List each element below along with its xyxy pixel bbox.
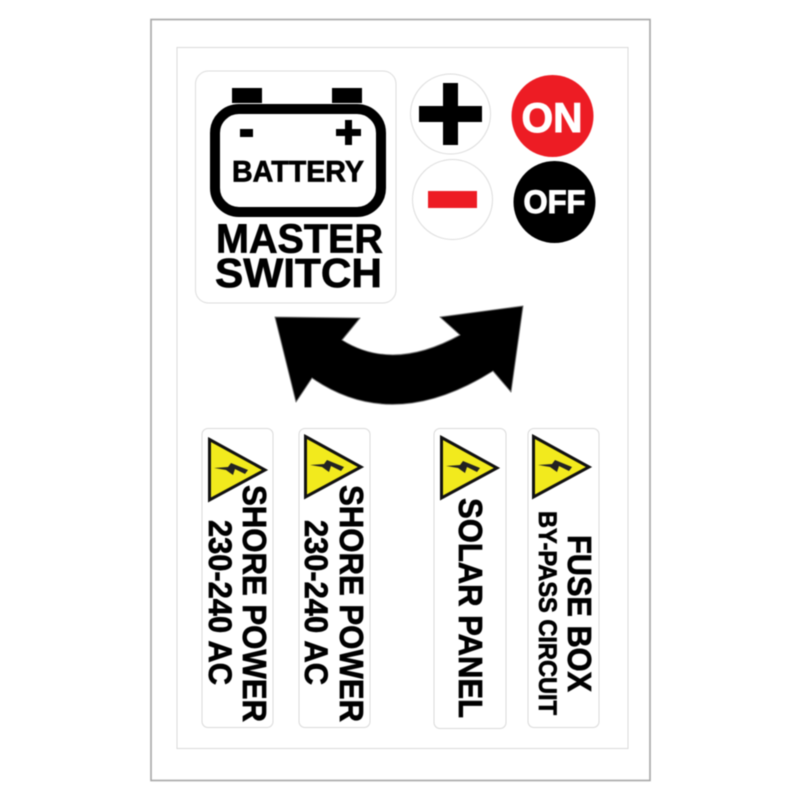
heading: switch: SWITCH bbox=[215, 250, 382, 296]
icon: warning triangle bbox=[534, 436, 589, 497]
label text: voltage: 230-240 AC bbox=[298, 520, 334, 685]
panel: fuse box label bbox=[528, 428, 599, 728]
panel: shore power label 2 bbox=[298, 428, 370, 728]
label text: shore power: SHORE POWER bbox=[236, 485, 273, 722]
outer sheet border bbox=[151, 20, 650, 780]
label text: voltage: 230-240 AC bbox=[202, 520, 238, 685]
icon: warning triangle bbox=[210, 440, 265, 500]
heading: master: MASTER bbox=[216, 216, 383, 262]
icon: on button bbox=[512, 75, 594, 157]
label text: by-pass circuit: BY-PASS CIRCUIT bbox=[533, 511, 561, 715]
icon: warning triangle bbox=[442, 438, 497, 498]
icon: on button: ON bbox=[522, 94, 582, 141]
panel: master switch bbox=[196, 71, 396, 303]
icon: plus button bbox=[410, 74, 490, 154]
inner sheet border bbox=[177, 48, 628, 748]
panel: solar panel label bbox=[434, 428, 506, 728]
battery label: BATTERY bbox=[232, 156, 364, 188]
label text: shore power: SHORE POWER bbox=[333, 485, 370, 722]
icon: warning triangle bbox=[306, 436, 361, 497]
icon: battery bbox=[215, 88, 381, 212]
label text: solar panel: SOLAR PANEL bbox=[452, 498, 489, 718]
icon: minus button bbox=[412, 160, 492, 240]
icon: off button bbox=[514, 161, 596, 243]
icon: off button: OFF bbox=[524, 184, 586, 220]
label text: fuse box: FUSE BOX bbox=[561, 535, 598, 692]
panel outline bbox=[196, 71, 396, 303]
arrow: double-headed curved arrow bbox=[275, 306, 523, 404]
panel: shore power label 1 bbox=[202, 428, 273, 728]
